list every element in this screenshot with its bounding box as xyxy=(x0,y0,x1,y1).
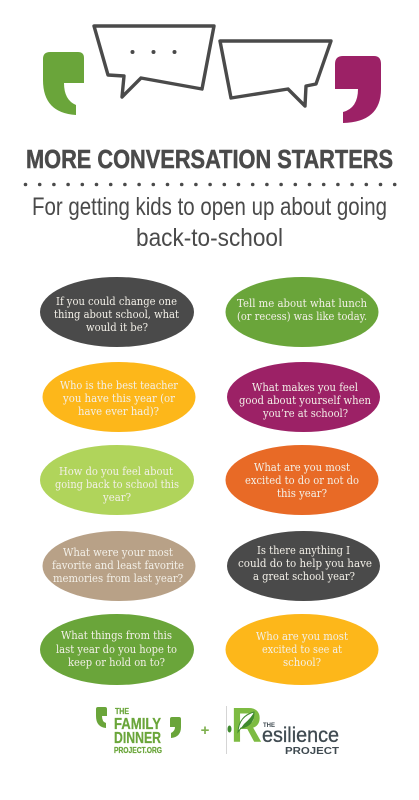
bubble: keep or hold on to: last year do you hope to xyxy=(56,642,177,656)
bubble: going back to school xyxy=(40,445,194,515)
bubble: feel good about yourself: you’re at school? xyxy=(262,406,348,420)
bubble: most excited xyxy=(226,445,378,515)
bubble: going back to school: How do you feel about xyxy=(59,464,173,478)
plus sign: + xyxy=(201,722,210,739)
bubble: favorite memories: What were your most xyxy=(63,545,173,559)
bubble: keep or hold on to: What things from this xyxy=(61,628,172,642)
logo: The Resilience Project: THE xyxy=(263,723,275,729)
bubble: best teacher: have ever had)? xyxy=(78,404,159,418)
icon: speech bubble with dots xyxy=(94,26,214,97)
bubble: most excited: What are you most xyxy=(254,460,350,474)
bubble: lunch or recess: Tell me about what lunch xyxy=(237,296,367,310)
bubble: lunch or recess xyxy=(226,277,378,347)
bubble: best teacher xyxy=(42,362,196,432)
logo: The Family Dinner Project: FAMILY xyxy=(114,716,161,733)
bubble: excited to see: excited to see at xyxy=(262,642,342,656)
bubble: excited to see: school? xyxy=(283,655,321,669)
bubble: anything I could do: Is there anything I xyxy=(257,543,350,557)
bubble: going back to school: year? xyxy=(102,490,131,504)
icon: empty speech bubble xyxy=(220,41,331,106)
bubble: change one thing: thing about school, what xyxy=(54,307,179,321)
bubble: keep or hold on to: keep or hold on to? xyxy=(68,655,165,669)
logo: The Family Dinner Project: PROJECT.ORG xyxy=(114,746,162,755)
bubble: keep or hold on to xyxy=(40,614,194,685)
logo: The Family Dinner Project: DINNER xyxy=(114,730,161,747)
logo: The Family Dinner Project xyxy=(96,706,181,755)
bubble: change one thing: would it be? xyxy=(86,320,148,334)
bubble: anything I could do: could do to help you have xyxy=(238,556,372,570)
bubble: excited to see: Who are you most xyxy=(256,629,348,643)
bubble: anything I could do xyxy=(227,531,380,601)
logo: The Resilience Project xyxy=(226,699,340,757)
icon: magenta closing quote mark xyxy=(335,56,381,123)
bubble: favorite memories xyxy=(42,531,196,601)
logo: The Family Dinner Project: THE xyxy=(115,706,129,716)
subtitle xyxy=(32,193,387,252)
bubble: excited to see xyxy=(226,614,378,685)
logo: The Resilience Project: PROJECT xyxy=(285,745,340,757)
bubble: best teacher: you have this year (or xyxy=(62,391,175,405)
bubble: best teacher: Who is the best teacher xyxy=(60,378,178,392)
logo: The Resilience Project: esilience xyxy=(262,724,339,747)
bubble: most excited: this year? xyxy=(277,486,327,500)
bubble: favorite memories: favorite and least favorite xyxy=(52,558,184,572)
bubble: feel good about yourself: What makes you feel xyxy=(252,380,358,394)
bubble: favorite memories: memories from last year? xyxy=(53,571,183,585)
bubble: change one thing xyxy=(40,277,194,347)
bubble: most excited: excited to do or not do xyxy=(245,473,359,487)
bubble: change one thing: If you could change one xyxy=(56,294,177,308)
bubble: going back to school: going back to school this xyxy=(55,477,179,491)
subtitle: back-to-school xyxy=(136,224,283,252)
logo: The Resilience Project: R xyxy=(231,699,262,753)
bubble: feel good about yourself xyxy=(227,362,380,432)
icon: green opening quote mark xyxy=(43,52,84,115)
bubble: feel good about yourself: good about yourself when xyxy=(239,393,371,407)
bubble: lunch or recess: (or recess) was like today. xyxy=(237,309,367,323)
bubble: anything I could do: a great school year? xyxy=(253,569,355,583)
